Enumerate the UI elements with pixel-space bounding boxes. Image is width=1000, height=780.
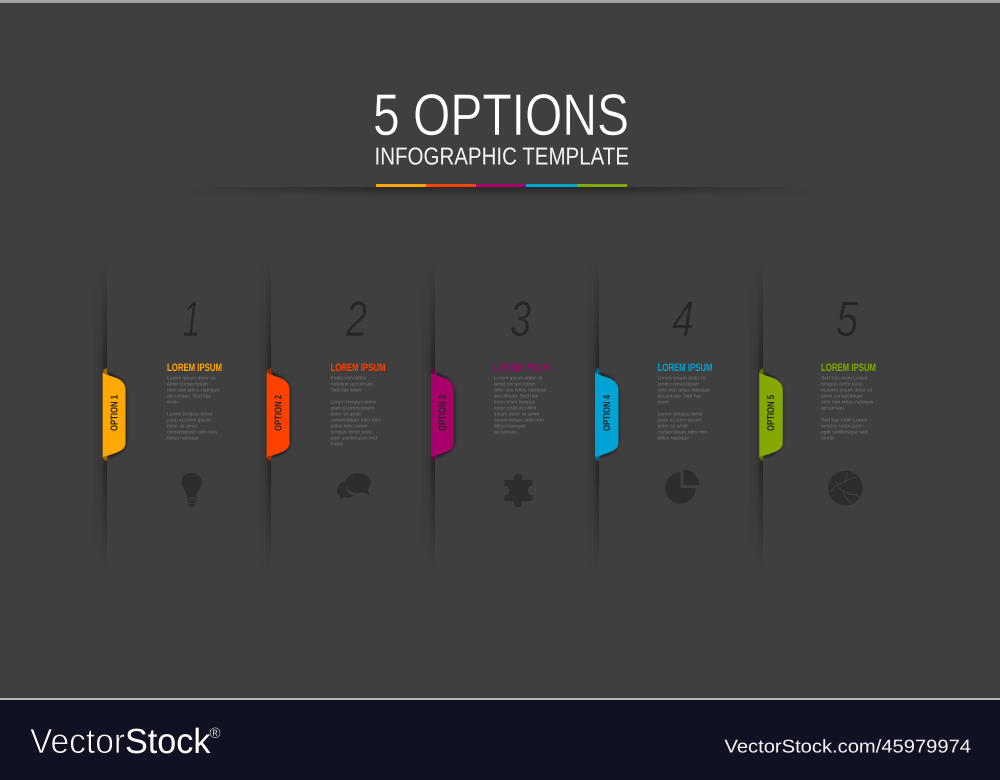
body text: Lorem tempus tortor	[658, 412, 703, 418]
body text: ipsum dolor sit amet	[494, 412, 540, 418]
body text: accumsan. Sed hac	[167, 394, 212, 400]
tab: option 3: OPTION 3	[438, 395, 449, 431]
footer image id: VectorStock.com/45979974	[724, 736, 971, 757]
tab: option 5	[759, 368, 783, 461]
footer separator	[0, 698, 1000, 700]
body text: justo eLorem ipsum	[656, 418, 702, 424]
tab: option 2	[267, 368, 290, 461]
body text: dolor sit amet	[330, 412, 361, 418]
body text: odio non tellus natoque	[494, 388, 546, 394]
number 5: 5	[836, 291, 858, 347]
body text: tempus tortor justo	[821, 382, 863, 388]
body text: amet consectetuer	[494, 382, 536, 388]
body text: amet consectetuer	[658, 382, 699, 388]
icon: pie chart	[665, 470, 699, 504]
tab: option 5: OPTION 5	[766, 395, 777, 431]
tab: option 4	[595, 368, 619, 461]
body text: Lorem ipsum dolor sit	[167, 376, 216, 382]
body text: tellus natoque	[167, 436, 199, 442]
top edge	[0, 0, 1000, 3]
icon: puzzle piece	[504, 474, 532, 507]
heading: LOREM IPSUM	[494, 362, 549, 374]
body text: justo eLorem ipsum	[330, 406, 375, 412]
panel: option 4	[595, 291, 712, 504]
body text: Lorem ipsum dolor sit	[494, 376, 543, 382]
body text: odio non tellus natoque	[821, 400, 873, 406]
panel: option 5	[759, 291, 876, 505]
tab: option 1	[103, 368, 126, 461]
body text: Fodio non tellus	[330, 376, 367, 382]
body text: tempus tortor justo	[330, 430, 372, 436]
body text: amet consectetuer	[821, 394, 863, 400]
body text: accumsan.	[821, 406, 845, 412]
body text: morbi.	[330, 442, 345, 448]
footer logo: Vector	[30, 722, 125, 761]
subtitle: INFOGRAPHIC TEMPLATE	[374, 143, 629, 170]
body text: eget scelerisque sed	[821, 430, 867, 436]
tab: option 2: OPTION 2	[273, 395, 284, 431]
body text: enim enim tempus	[494, 400, 536, 406]
body text: justo eLorem ipsum	[166, 418, 211, 424]
body text: consectetuer odio non	[658, 430, 707, 436]
tab: option 3	[431, 368, 455, 461]
tab: option 1: OPTION 1	[109, 395, 120, 431]
number 3: 3	[510, 291, 531, 347]
body text: Sed hac enim Lorem	[821, 376, 868, 382]
panel: option 1	[103, 291, 222, 508]
body text: tortor justo eLorem	[494, 406, 536, 412]
footer logo	[30, 722, 221, 761]
body text: odio non tellus natoque	[167, 388, 219, 394]
number 4: 4	[672, 291, 694, 347]
column edge shadows	[101, 291, 763, 539]
body text	[166, 376, 219, 442]
number 1: 1	[183, 291, 200, 347]
body text	[821, 376, 873, 442]
body text	[494, 376, 546, 436]
body text: natoque accumsan.	[330, 382, 375, 388]
heading: LOREM IPSUM	[821, 362, 876, 374]
footer band	[0, 700, 1000, 780]
body text: enim	[658, 400, 668, 406]
footer logo: Stock	[125, 722, 211, 761]
body text: Lorem tempus tortor	[330, 400, 376, 406]
body text: Lorem tempus tortor	[167, 412, 213, 418]
body text: accumsan.	[494, 430, 518, 436]
heading: LOREM IPSUM	[330, 362, 386, 374]
body text: odio non tellus natoque	[658, 388, 710, 394]
body text: tellus natoque	[658, 436, 689, 442]
body text	[656, 376, 710, 442]
title: 5 OPTIONS	[373, 82, 629, 148]
title underline shadow	[256, 187, 744, 194]
body text: accumsan. Sed hac	[658, 394, 702, 400]
icon: speech bubbles	[337, 473, 371, 500]
heading: LOREM IPSUM	[167, 362, 222, 374]
body text: eget scelerisque sed	[330, 436, 377, 442]
body text: Lorem ipsum dolor sit	[658, 376, 706, 382]
body text: morbi.	[821, 436, 835, 442]
body text: consectetuer odio non	[167, 430, 217, 436]
body text: Sed hac enim Lorem	[821, 418, 868, 424]
body text: amet consectetuer	[167, 382, 209, 388]
body text: Sed hac enim	[330, 388, 361, 394]
icon: light bulb	[182, 473, 202, 508]
body text: eLorem ipsum dolor sit	[821, 388, 873, 394]
footer logo: ®	[210, 725, 221, 742]
body text: accumsan. Sed hac	[494, 394, 539, 400]
body text: enim	[167, 400, 178, 406]
body text: tempus tortor justo	[821, 424, 863, 430]
body text: dolor sit amet	[658, 424, 688, 430]
body text: consectetuer odio non	[494, 418, 544, 424]
icon: globe	[828, 471, 863, 505]
body text: consectetuer odio non	[330, 418, 380, 424]
number 2: 2	[345, 291, 367, 347]
tab: option 4: OPTION 4	[602, 395, 613, 431]
panel: option 2	[267, 291, 386, 500]
panel: option 3	[431, 291, 549, 507]
body text: tellus natoque	[494, 424, 526, 430]
colour underline	[376, 184, 627, 187]
body text	[330, 376, 380, 448]
body text: dolor sit amet	[167, 424, 198, 430]
heading: LOREM IPSUM	[658, 362, 712, 374]
body text: tellus nim Lorem	[330, 424, 368, 430]
